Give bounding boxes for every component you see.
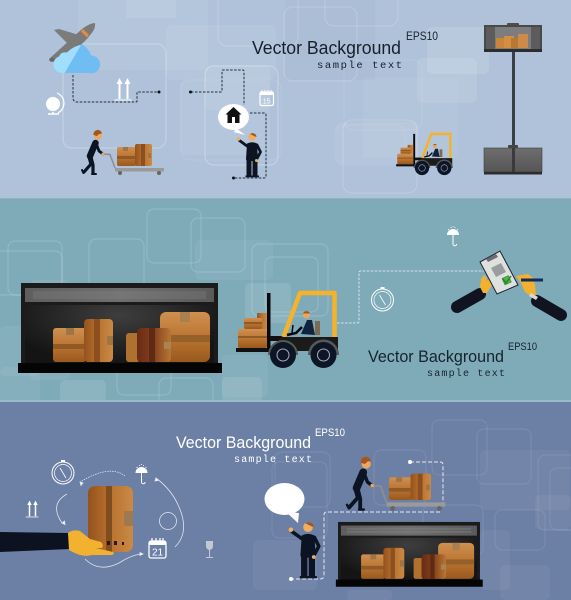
speech bubble	[264, 483, 304, 523]
icon: this way up arrows	[114, 78, 132, 100]
route end dot	[158, 90, 160, 94]
title: top panel heading: sample text	[317, 60, 402, 72]
title: top panel heading: EPS10	[406, 29, 438, 43]
title: top panel heading: Vector Background	[252, 38, 401, 58]
icon: cloud	[53, 44, 100, 73]
person: standing man	[237, 133, 260, 177]
icon: umbrella	[447, 226, 459, 246]
large forklift	[236, 293, 339, 368]
icon: calendar: 15	[263, 98, 271, 106]
dashed route: left	[73, 75, 158, 102]
icon: calendar	[149, 538, 166, 558]
icon: fragile glass	[206, 541, 213, 558]
icon: umbrella	[136, 464, 148, 484]
cycle arrows	[57, 471, 184, 567]
icon: stopwatch	[52, 460, 74, 484]
warehouse with boxes	[336, 522, 483, 587]
panel: top light blue band	[0, 0, 571, 198]
panel: bottom slate band	[0, 198, 571, 600]
title: middle panel heading: EPS10	[508, 341, 537, 353]
title: middle panel heading: Vector Background	[368, 347, 504, 366]
title: bottom panel heading: sample text	[234, 454, 312, 466]
icon: globe	[46, 93, 64, 114]
speech bubble with house icon	[218, 104, 249, 135]
small forklift	[396, 134, 453, 175]
dashed route: bottom upper	[291, 462, 443, 579]
warehouse tower	[484, 23, 542, 174]
title: middle panel heading: sample text	[427, 368, 505, 380]
route dots	[289, 460, 412, 581]
person with hand cart and boxes	[347, 457, 445, 511]
title: bottom panel heading: EPS10	[315, 427, 345, 439]
title: bottom panel heading	[176, 427, 345, 466]
large warehouse with boxes	[18, 283, 222, 373]
icon: calendar: 21	[152, 548, 163, 558]
cardboard box held by hand	[88, 486, 133, 552]
route dots	[189, 90, 235, 180]
icon: airplane	[49, 23, 95, 62]
title: top panel heading	[252, 29, 438, 72]
title: bottom panel heading: Vector Background	[176, 433, 311, 452]
icon: stopwatch	[372, 287, 394, 311]
panel: middle teal band	[0, 198, 571, 408]
title: middle panel heading	[368, 341, 537, 380]
person with hand cart and boxes	[82, 130, 164, 175]
dashed route: right	[191, 70, 266, 178]
dashed route: middle panel	[337, 271, 484, 323]
arm and hand	[0, 530, 114, 556]
icon: this way up arrows	[26, 500, 38, 517]
person: standing man	[289, 522, 319, 578]
hands holding clipboard and pen	[457, 251, 561, 315]
icon: calendar	[260, 90, 274, 106]
